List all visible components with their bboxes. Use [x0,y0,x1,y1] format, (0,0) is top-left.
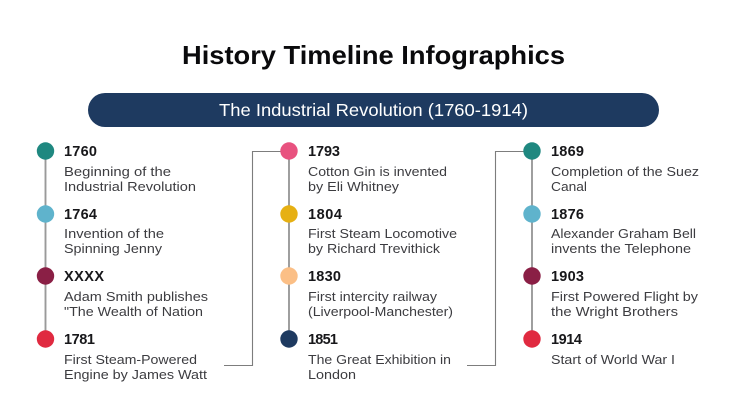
event 1869: Canal [551,179,587,194]
banner: The Industrial Revolution (1760-1914) [219,100,528,120]
event 1764: Spinning Jenny [64,241,163,256]
event 1793: by Eli Whitney [308,179,400,194]
event 1793: Cotton Gin is invented [308,164,447,179]
panel: column 3 timeline [523,142,699,367]
event 1781: First Steam-Powered [64,352,197,367]
event 1851: The Great Exhibition in [308,352,451,367]
event 1903: the Wright Brothers [551,304,679,319]
event XXXX [37,267,209,319]
panel: column 2 timeline [280,142,457,382]
banner [88,93,659,127]
event XXXX: "The Wealth of Nation [64,304,203,319]
title: History Timeline Infographics [182,40,565,70]
event 1830: 1830 [308,269,341,285]
event 1781: Engine by James Watt [64,367,207,382]
connector: column 1 to column 2 [224,152,282,366]
event XXXX: XXXX [64,269,104,285]
event 1760 [37,142,196,194]
connector: column 2 to column 3 [467,152,525,366]
event 1903 [523,267,699,319]
event 1851: 1851 [308,332,338,348]
event 1851: London [308,367,356,382]
event 1830: First intercity railway [308,289,438,304]
event 1804: First Steam Locomotive [308,226,457,241]
event 1830 [280,267,453,319]
event 1914: Start of World War I [551,352,675,367]
event 1903: First Powered Flight by [551,289,699,304]
event 1781 [37,330,207,382]
event 1804 [280,205,457,256]
event 1876: Alexander Graham Bell [551,226,696,241]
event 1830: (Liverpool-Manchester) [308,304,453,319]
event 1793 [280,142,447,194]
panel: column 1 timeline [37,142,209,382]
event 1903: 1903 [551,269,584,285]
event 1793: 1793 [308,144,340,160]
event 1851 [280,330,451,382]
event 1764: Invention of the [64,226,164,241]
event 1804: 1804 [308,207,342,223]
event 1760: Beginning of the [64,164,171,179]
event 1914: 1914 [551,332,582,348]
event 1764 [37,205,164,256]
event 1876 [523,205,696,256]
event 1914 [523,330,675,367]
event XXXX: Adam Smith publishes [64,289,209,304]
event 1869: Completion of the Suez [551,164,699,179]
event 1869: 1869 [551,144,584,160]
event 1804: by Richard Trevithick [308,241,441,256]
event 1781: 1781 [64,332,95,348]
event 1876: 1876 [551,207,584,223]
event 1764: 1764 [64,207,97,223]
event 1760: 1760 [64,144,97,160]
event 1869 [523,142,699,194]
event 1876: invents the Telephone [551,241,691,256]
event 1760: Industrial Revolution [64,179,196,194]
